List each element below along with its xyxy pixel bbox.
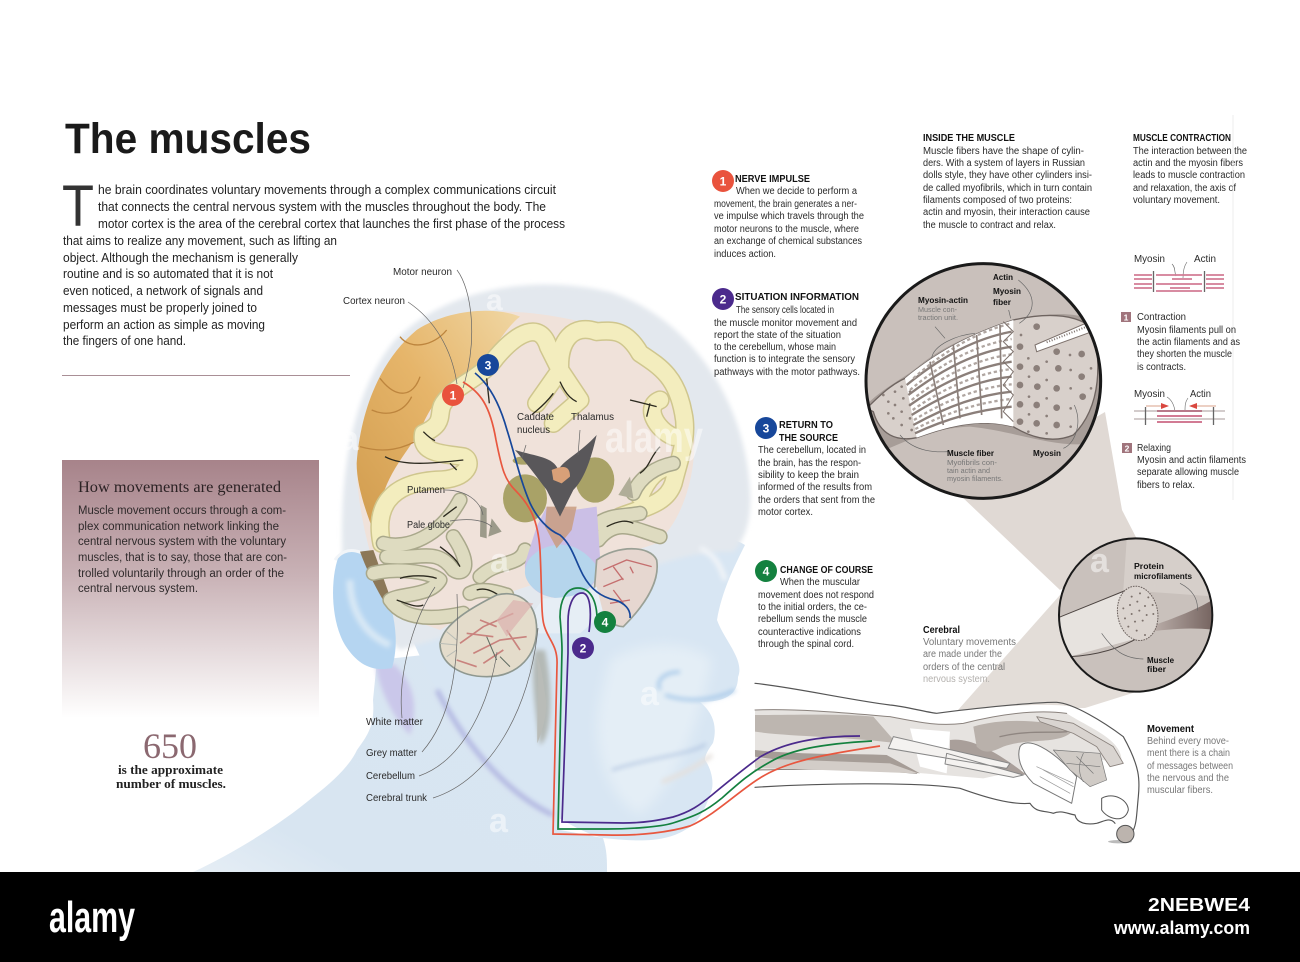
brain labels: Putamen [407,485,445,496]
step: contraction: the actin filaments and as [1137,337,1240,348]
watermark: a [490,542,510,580]
thalamus lobes [503,474,547,522]
step 2: situation information: the muscle monitor movement and [714,318,857,329]
caption: cerebral: Cerebral [923,625,960,636]
step: contraction: they shorten the muscle [1137,349,1232,360]
facial highlights [597,645,712,815]
diagram: relaxed sarcomere: Myosin [1134,254,1165,265]
dark fold at lower left [360,550,390,603]
inset circle labels: tain actin and [947,466,990,475]
putamen and pale globe [480,505,487,538]
caption: movement: the nervous and the [1147,773,1229,784]
intro text block: messages must be properly joined to [63,301,257,315]
brainstem [525,507,600,598]
icon: arrows [1161,403,1197,409]
text block: inside the muscle [923,133,1092,231]
caption: cerebral: are made under the [923,649,1002,660]
badge: 3 on brain [477,354,499,376]
illustration: head silhouette [193,284,750,872]
step: relaxing: Myosin and actin filaments [1137,455,1246,466]
text block: inside the muscle: de called myofibrils, which in turn contain [923,183,1092,194]
myofibril dots [882,323,1092,435]
text block: muscle contraction: MUSCLE CONTRACTION [1133,133,1231,144]
brain labels [343,267,614,804]
cream gyri band [380,330,685,543]
text block: muscle contraction [1133,133,1247,206]
brain labels: Pale globe [407,520,450,531]
step 3: return to the source: THE SOURCE [779,433,838,444]
ventricle [515,435,597,517]
detail circle labels [1134,561,1192,674]
inset circle labels: Myosin [993,286,1021,296]
text block: muscle contraction: The interaction between the [1133,146,1247,157]
step: relaxing: fibers to relax. [1137,480,1195,491]
text block: inside the muscle: filaments composed of two proteins: [923,195,1072,206]
caption: cerebral: orders of the central [923,662,1005,673]
text block: inside the muscle: INSIDE THE MUSCLE [923,133,1015,144]
step 2: situation information: function is to integrate the sensory [714,354,855,365]
caption: movement: Behind every move- [1147,736,1229,747]
panel body text: trolled voluntarily through an order of the [78,568,284,580]
step 1: nerve impulse: ve impulse which travels through the [714,211,864,222]
intro text block: he brain coordinates voluntary movements through a complex communications circuit [98,183,556,197]
step 4: change of course: counteractive indications [758,627,861,638]
step 3: return to the source: 3 [763,422,770,436]
step 1: nerve impulse: induces action. [714,249,776,260]
caption: movement: Movement [1147,724,1195,735]
illustration: lower cerebellum and trunk [440,594,546,743]
step: contraction: Contraction [1137,312,1186,323]
brain labels: Cerebellum [366,771,415,782]
panel body text: Muscle movement occurs through a com- [78,505,286,517]
badge: 1 on brain: 1 [450,388,457,402]
step 4: change of course: CHANGE OF COURSE [780,565,873,576]
step 3: return to the source [755,417,875,518]
text block: muscle contraction: actin and the myosin fibers [1133,158,1243,169]
tendons [910,728,950,773]
nerve pathway: blue [475,373,630,618]
inset circle labels [918,272,1061,483]
connector wedge: detail circle to arm [958,595,1136,710]
detail circle labels: fiber [1147,664,1167,674]
site url: www.alamy.com [1113,918,1250,938]
inset circle labels: Muscle fiber [947,448,995,458]
text block: inside the muscle: Muscle fibers have the shape of cylin- [923,146,1084,157]
caption: cerebral [923,625,1016,685]
step: contraction: is contracts. [1137,362,1186,373]
step 1: nerve impulse: 1 [720,174,727,188]
step 1: nerve impulse [712,170,864,260]
temporal lobe gyri [373,463,673,617]
brain labels: White matter [366,717,424,728]
step 4: change of course: movement does not respond [758,590,874,601]
palm structure [1019,743,1077,803]
panel heading: How movements are generated [78,479,281,496]
step 1: nerve impulse: movement, the brain generates a ner- [714,199,857,210]
diagram: relaxed sarcomere [1134,254,1224,292]
diagram: contracted sarcomere: Actin [1190,389,1211,400]
text block: muscle contraction: and relaxation, the axis of [1133,183,1236,194]
step: relaxing: Relaxing [1137,443,1171,454]
step 3: return to the source: sibility to keep the brain [758,470,859,481]
detail circle labels: microfilaments [1134,571,1192,581]
nerve pathway: green [558,588,872,829]
detail circle: protein microfilaments [1057,538,1217,692]
icon: ear [333,550,396,669]
footer bar [0,872,1300,962]
brain labels: Cerebral trunk [366,793,428,804]
leader lines for brain labels [401,270,580,798]
stat: 650 muscles: is the approximate [118,762,223,777]
face [400,520,745,840]
step 2: situation information: SITUATION INFORMATION [735,292,859,303]
watermark: a [340,420,360,458]
orange cortex [357,311,520,552]
intro text block: that aims to realize any movement, such as lifting an [63,234,337,248]
intro text block: the fingers of one hand. [63,334,186,348]
neck [193,640,607,872]
brain labels: Caudate [517,412,554,423]
step 4: change of course: rebellum sends the muscle [758,614,867,625]
step 2: situation information: 2 [720,292,727,306]
watermark: alamy [605,413,703,462]
step 3: return to the source: the brain, has the respon- [758,458,861,469]
inset circle labels: Myosin-actin [918,295,968,305]
intro text block: object. Although the mechanism is generally [63,251,299,265]
brain labels: Motor neuron [393,267,452,278]
panel body text: muscles, that is to say, those that are con- [78,552,287,564]
connector wedge: big circle to detail circle [960,412,1140,590]
step 4: change of course: to the initial orders, the ce- [758,602,867,613]
text block: inside the muscle: actin and myosin, their interaction cause [923,207,1090,218]
brain labels: nucleus [517,425,550,436]
intro text block: that connects the central nervous system with the muscles throughout the body. The [98,200,546,214]
inset circle labels: traction unit. [918,313,958,322]
text block: inside the muscle: ders. With a system of layers in Russian [923,158,1085,169]
image id: 2NEBWE4 [1148,895,1250,915]
panel: how movements are generated [62,460,319,718]
footer logo: alamy [49,893,135,942]
diagram: contracted sarcomere [1134,389,1225,425]
step 3: return to the source: RETURN TO [779,420,833,431]
step: contraction: Myosin filaments pull on [1137,325,1236,336]
step: relaxing [1122,443,1246,491]
step 1: nerve impulse: NERVE IMPULSE [735,174,810,185]
brain labels: Grey matter [366,748,418,759]
text block: inside the muscle: the muscle to contract and relax. [923,220,1056,231]
inset circle labels: Actin [993,272,1013,282]
caption: cerebral: nervous system. [923,674,990,685]
step: relaxing: separate allowing muscle [1137,467,1239,478]
icon: thumb [1102,796,1128,819]
step: contraction: 1 [1124,312,1129,322]
panel body text [78,505,287,595]
step 1: nerve impulse: When we decide to perform a [736,186,857,197]
step 4: change of course: When the muscular [780,577,861,588]
badge: 4 on brain [594,611,616,633]
step 3: return to the source: The cerebellum, located in [758,445,866,456]
badge: 4 on brain: 4 [602,616,609,630]
step 4: change of course: through the spinal cord. [758,639,854,650]
nerve pathway: red [463,382,880,835]
watermark: a [486,284,503,317]
brain base tissue [357,312,694,630]
diagram: relaxed sarcomere: Actin [1194,254,1216,265]
intro text block: perform an action as simple as moving [63,318,265,332]
stat: 650 muscles: 650 [143,726,197,766]
watermark: a [1090,542,1110,580]
detail circle labels: Protein [1134,561,1164,571]
intro text block [62,174,565,348]
panel body text: central nervous system. [78,583,198,595]
brain labels: Thalamus [571,412,614,423]
cerebellum upper [593,549,657,627]
step 2: situation information: to the cerebellum, whose main [714,342,836,353]
leader lines [900,280,1078,452]
step 2: situation information [712,288,860,378]
intro text block: routine and is so automated that it is not [63,267,273,281]
stat: 650 muscles [116,726,226,791]
inset circle: muscle fiber structure [860,264,1103,498]
inset circle labels: Myofibrils con- [947,458,997,467]
step: contraction [1121,312,1240,373]
brainstem lower pale area [530,587,603,633]
brain labels: Cortex neuron [343,296,405,307]
step 2: situation information: pathways with the motor pathways. [714,367,860,378]
caption: movement: muscular fibers. [1147,785,1213,796]
badge: 3 on brain: 3 [485,358,492,372]
detail circle labels: Muscle [1147,655,1174,665]
nerve pathway: purple [562,593,860,823]
illustration: brain cross-section [357,311,694,633]
caption: movement [1147,724,1233,796]
arm skin [755,683,1143,827]
watermark: a [640,675,660,713]
panel body text: central nervous system with the voluntary [78,536,286,548]
badge: 2 on brain [572,637,594,659]
step 1: nerve impulse: an exchange of chemical substances [714,236,862,247]
text block: muscle contraction: voluntary movement. [1133,195,1220,206]
step 4: change of course: 4 [763,564,770,578]
forearm muscles [755,710,1122,778]
caption: movement: ment there is a chain [1147,748,1230,759]
step 2: situation information: report the state of the situation [714,330,841,341]
intro text block: T [62,174,94,239]
stat: 650 muscles: number of muscles. [116,776,226,791]
badge: 2 on brain: 2 [580,642,587,656]
step 1: nerve impulse: motor neurons to the muscle, where [714,224,859,235]
sarcomere fan lines [907,323,1012,433]
icon: ball [1108,825,1134,843]
skull halo [342,284,750,650]
step 2: situation information: The sensory cells located in [736,305,834,316]
badge: 1 on brain [442,384,464,406]
watermark: a [489,802,509,840]
sulci [385,378,660,606]
step 4: change of course [755,560,874,650]
inset circle labels: myosin filaments. [947,474,1003,483]
inset circle labels: Myosin [1033,448,1061,458]
step 3: return to the source: motor cortex. [758,507,813,518]
caption: movement: of messages between [1147,761,1233,772]
caption: cerebral: Voluntary movements [923,637,1016,648]
panel body text: plex communication network linking the [78,521,279,533]
title: The muscles [65,115,311,163]
intro text block: motor cortex is the area of the cerebral cortex that launches the first phase of the process [98,217,565,231]
text block: muscle contraction: leads to muscle contraction [1133,170,1245,181]
diagram: contracted sarcomere: Myosin [1134,389,1165,400]
inset circle labels: Muscle con- [918,305,957,314]
inset circle labels: fiber [993,297,1012,307]
step 3: return to the source: informed of the results from [758,482,872,493]
step: relaxing: 2 [1125,444,1130,454]
intro text block: even noticed, a network of signals and [63,284,263,298]
watermark [340,284,1110,840]
step 3: return to the source: the orders that sent from the [758,495,875,506]
illustration: forearm and hand [755,683,1143,843]
text block: inside the muscle: dolls style, they have other cylinders insi- [923,170,1092,181]
